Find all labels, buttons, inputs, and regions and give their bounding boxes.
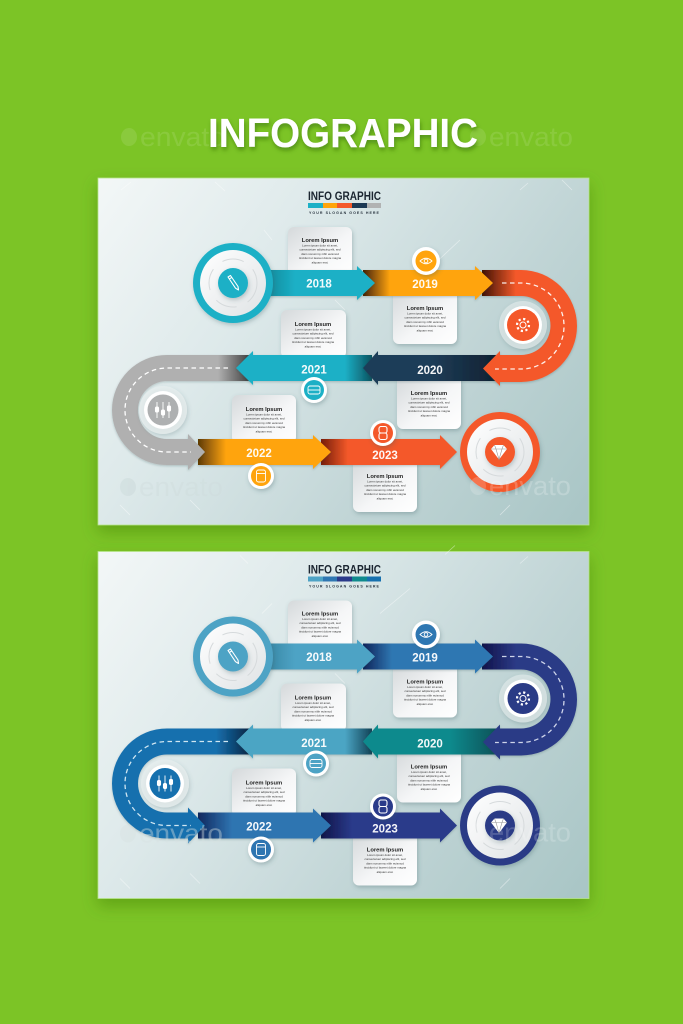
watermark: envato panel left: envato [139, 472, 223, 502]
card: 2018 text: Lorem Ipsum [302, 612, 338, 618]
arrow: 2020 [363, 351, 500, 385]
card: 2018 text [288, 227, 352, 275]
card: 2022 text: tincidunt ut laoreet dolore magna [243, 799, 285, 803]
arrow: 2018: 2018 [306, 278, 332, 290]
card: 2019 text [393, 291, 457, 344]
arrow: 2018 [268, 266, 375, 300]
card: 2020 text: consectetuer adipiscing elit, sed [409, 401, 450, 405]
road: navy curve [482, 644, 577, 760]
card: 2023 text: consectetuer adipiscing elit, sed [365, 857, 406, 861]
card: 2021 text: tincidunt ut laoreet dolore magna [292, 714, 334, 718]
card: 2023 text: diam nonummy nibh euismod [366, 488, 404, 492]
card: 2019 text: aliquam erat. [417, 702, 434, 706]
card: 2018 text: tincidunt ut laoreet dolore magna [299, 256, 341, 260]
road: blue curve [112, 728, 250, 844]
arrow: 2020: 2020 [417, 738, 443, 750]
heading: info graphic: INFO GRAPHIC [308, 191, 381, 203]
card: 2018 text: aliquam erat. [312, 634, 329, 638]
card: 2018 text: Lorem Ipsum [302, 238, 338, 244]
card: 2023 text: diam nonummy nibh euismod [366, 861, 404, 865]
arrow: 2022 [198, 435, 331, 469]
card: 2023 text: aliquam erat. [377, 496, 394, 500]
card: 2021 text: aliquam erat. [305, 344, 322, 348]
card: 2019 text: Lorem Ipsum [407, 306, 443, 312]
icon: hourglass [370, 420, 396, 446]
road: grey curve [112, 355, 250, 470]
card: 2019 text: aliquam erat. [417, 328, 434, 332]
icon: sliders [139, 386, 187, 434]
card: 2019 text: consectetuer adipiscing elit, sed [405, 689, 446, 693]
icon: card [303, 750, 329, 776]
heading: info graphic: YOUR SLOGAN GOES HERE [309, 584, 380, 588]
heading: info graphic: INFO GRAPHIC [308, 564, 381, 576]
arrow: 2018: 2018 [306, 652, 332, 664]
icon: eye [412, 247, 440, 275]
arrow: 2018 [268, 640, 375, 674]
card: 2018 text [288, 600, 352, 648]
card: 2021 text: Lorem Ipsum [295, 322, 331, 328]
arrow: 2022 [198, 808, 331, 842]
arrow: 2023: 2023 [372, 450, 398, 462]
card: 2020 text: diam nonummy nibh euismod [410, 778, 448, 782]
arrow: 2019 [363, 640, 493, 674]
card: 2018 text: consectetuer adipiscing elit, sed [300, 621, 341, 625]
circle: finish diamond [460, 786, 540, 866]
circle: finish diamond [460, 412, 540, 492]
arrow: 2023 [321, 435, 457, 469]
card: 2022 text: diam nonummy nibh euismod [245, 421, 283, 425]
card: 2018 text: tincidunt ut laoreet dolore magna [299, 630, 341, 634]
icon: barrel [248, 463, 274, 489]
heading: info graphic: YOUR SLOGAN GOES HERE [309, 211, 380, 215]
card: 2020 text: Lorem Ipsum [411, 391, 447, 397]
card: 2021 text: aliquam erat. [305, 718, 322, 722]
card: 2018 text: consectetuer adipiscing elit, sed [300, 248, 341, 252]
card: 2018 text: Lorem ipsum dolor sit amet, [302, 244, 338, 248]
icon: gear [499, 301, 547, 349]
circle: start pencil [193, 616, 273, 696]
card: 2022 text: Lorem ipsum dolor sit amet, [246, 412, 282, 416]
card: 2019 text: Lorem Ipsum [407, 680, 443, 686]
card: 2023 text: Lorem ipsum dolor sit amet, [367, 853, 403, 857]
road: orange curve [482, 270, 577, 386]
card: 2020 text [397, 750, 461, 802]
arrow: 2019: 2019 [412, 279, 438, 291]
icon: card [301, 377, 327, 403]
icon: barrel [248, 836, 274, 862]
arrow: 2019 [363, 266, 493, 300]
card: 2019 text: tincidunt ut laoreet dolore magna [404, 698, 446, 702]
card: 2019 text [393, 664, 457, 718]
card: 2022 text: Lorem ipsum dolor sit amet, [246, 786, 282, 790]
arrow: 2021 [236, 724, 372, 758]
card: 2019 text: diam nonummy nibh euismod [406, 693, 444, 697]
card: 2018 text: diam nonummy nibh euismod [301, 625, 339, 629]
card: 2019 text: tincidunt ut laoreet dolore magna [404, 324, 446, 328]
card: 2019 text: Lorem ipsum dolor sit amet, [407, 312, 443, 316]
icon: eye [412, 620, 440, 648]
card: 2022 text: diam nonummy nibh euismod [245, 794, 283, 798]
card: 2021 text: diam nonummy nibh euismod [294, 336, 332, 340]
card: 2020 text: aliquam erat. [421, 787, 438, 791]
arrow: 2021: 2021 [301, 738, 327, 750]
arrow: 2023 [321, 808, 457, 842]
arrow: 2022: 2022 [246, 448, 272, 460]
arrow: 2021: 2021 [301, 364, 327, 376]
icon: hourglass [370, 794, 396, 820]
card: 2020 text: diam nonummy nibh euismod [410, 405, 448, 409]
watermark: envato panel left: envato [139, 818, 223, 848]
card: 2020 text: consectetuer adipiscing elit, sed [409, 774, 450, 778]
card: 2022 text: consectetuer adipiscing elit, sed [244, 790, 285, 794]
panel: blue timeline [98, 546, 589, 898]
card: 2020 text: Lorem ipsum dolor sit amet, [411, 770, 447, 774]
card: 2019 text: Lorem ipsum dolor sit amet, [407, 685, 443, 689]
circle: start pencil [193, 243, 273, 323]
arrow: 2023: 2023 [372, 824, 398, 836]
card: 2019 text: diam nonummy nibh euismod [406, 320, 444, 324]
arrow: 2022: 2022 [246, 822, 272, 834]
card: 2020 text [397, 376, 461, 429]
card: 2023 text [353, 834, 417, 886]
card: 2022 text: aliquam erat. [256, 429, 273, 433]
arrow: 2019: 2019 [412, 652, 438, 664]
watermark: envato panel right: envato [489, 818, 571, 848]
card: 2021 text [281, 684, 346, 732]
card: 2019 text: consectetuer adipiscing elit, sed [405, 316, 446, 320]
arrow: 2021 [236, 351, 372, 385]
card: 2023 text: consectetuer adipiscing elit, sed [365, 484, 406, 488]
card: 2023 text: tincidunt ut laoreet dolore magna [364, 866, 406, 870]
card: 2018 text: diam nonummy nibh euismod [301, 252, 339, 256]
title: INFOGRAPHIC [208, 110, 478, 156]
card: 2023 text [353, 460, 417, 512]
card: 2022 text [232, 395, 296, 443]
card: 2021 text: Lorem ipsum dolor sit amet, [295, 328, 331, 332]
arrow: 2020: 2020 [417, 365, 443, 377]
heading: info graphic [308, 191, 381, 215]
watermark: envato panel right: envato [489, 471, 571, 501]
card: 2023 text: Lorem Ipsum [367, 474, 403, 480]
card: 2022 text [232, 768, 296, 816]
card: 2020 text: Lorem Ipsum [411, 764, 447, 770]
card: 2023 text: aliquam erat. [377, 870, 394, 874]
card: 2021 text: Lorem Ipsum [295, 696, 331, 702]
watermark: envato title left: envato [140, 122, 225, 152]
card: 2022 text: aliquam erat. [256, 803, 273, 807]
card: 2022 text: Lorem Ipsum [246, 407, 282, 413]
card: 2020 text: tincidunt ut laoreet dolore magna [408, 409, 450, 413]
card: 2020 text: aliquam erat. [421, 413, 438, 417]
card: 2022 text: tincidunt ut laoreet dolore magna [243, 425, 285, 429]
card: 2018 text: Lorem ipsum dolor sit amet, [302, 617, 338, 621]
card: 2021 text [281, 310, 346, 358]
panel: orange and teal timeline [98, 178, 589, 525]
card: 2021 text: tincidunt ut laoreet dolore magna [292, 340, 334, 344]
card: 2021 text: diam nonummy nibh euismod [294, 709, 332, 713]
card: 2021 text: consectetuer adipiscing elit, sed [293, 332, 334, 336]
card: 2018 text: aliquam erat. [312, 260, 329, 264]
arrow: 2020 [363, 724, 500, 758]
card: 2022 text: Lorem Ipsum [246, 780, 282, 786]
card: 2023 text: Lorem ipsum dolor sit amet, [367, 480, 403, 484]
card: 2021 text: Lorem ipsum dolor sit amet, [295, 701, 331, 705]
card: 2021 text: consectetuer adipiscing elit, sed [293, 705, 334, 709]
card: 2023 text: tincidunt ut laoreet dolore magna [364, 492, 406, 496]
icon: gear [499, 674, 547, 722]
card: 2020 text: tincidunt ut laoreet dolore magna [408, 783, 450, 787]
card: 2020 text: Lorem ipsum dolor sit amet, [411, 396, 447, 400]
icon: sliders [141, 760, 189, 808]
card: 2023 text: Lorem Ipsum [367, 848, 403, 854]
card: 2022 text: consectetuer adipiscing elit, sed [244, 417, 285, 421]
watermark: envato title right: envato [489, 122, 573, 152]
heading: info graphic [308, 564, 381, 588]
